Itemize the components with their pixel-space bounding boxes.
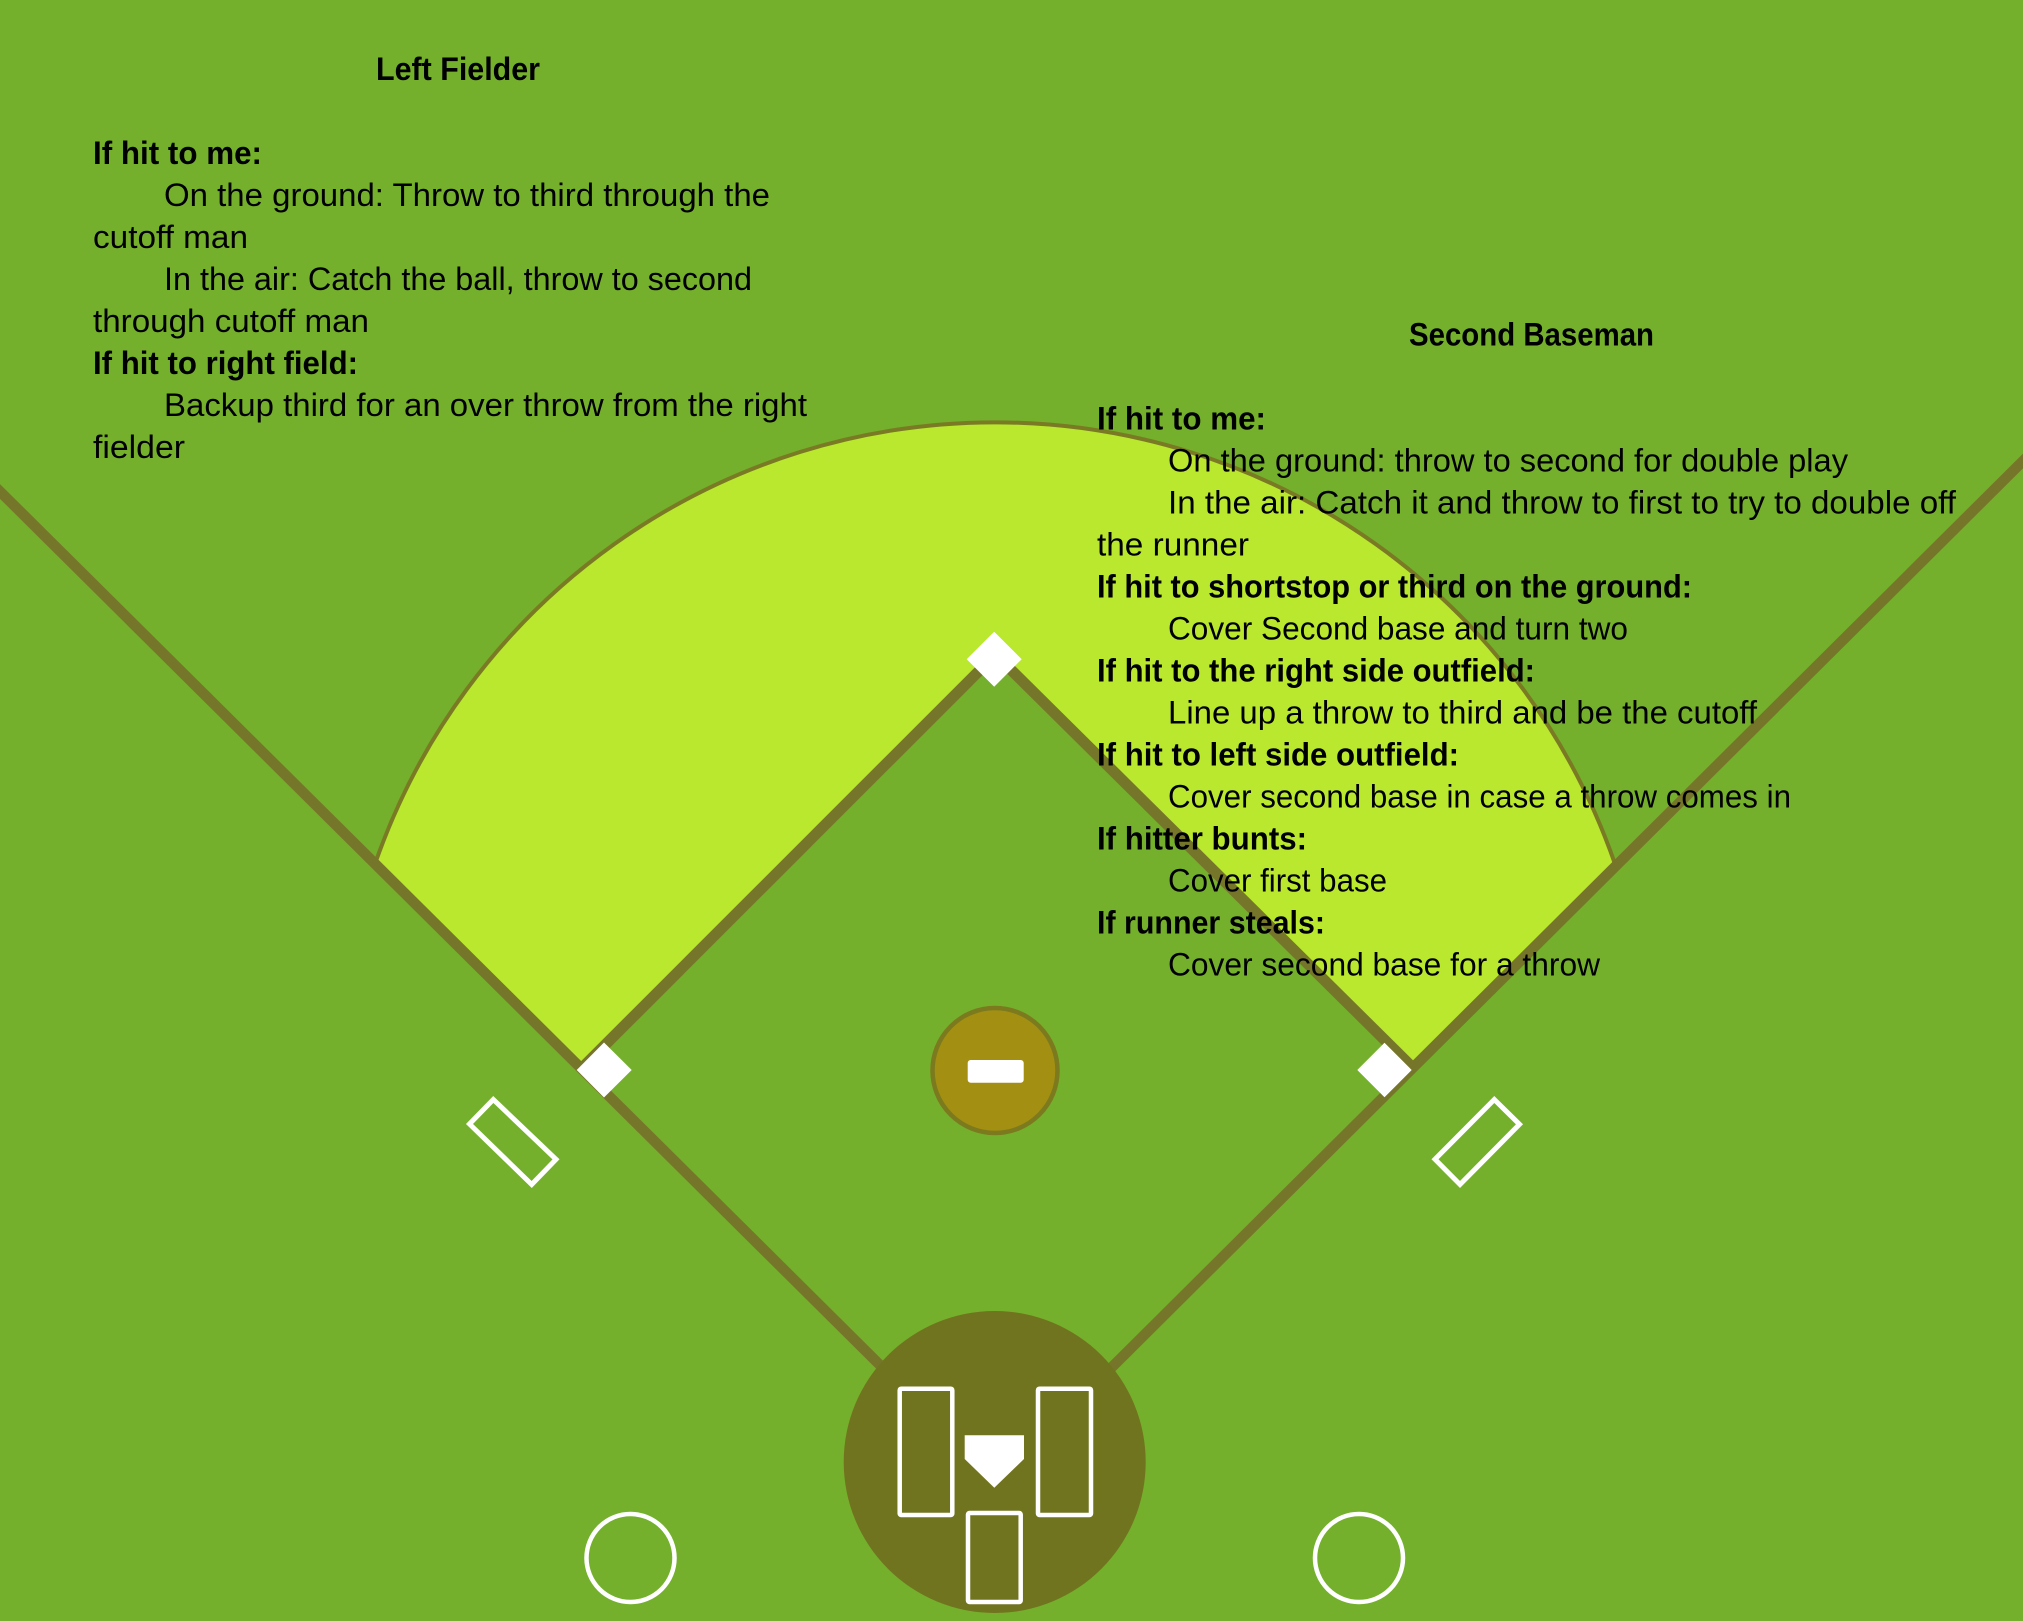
text block: second baseman: If hit to left side outfield:: [1097, 736, 1459, 772]
text block: second baseman: Cover second base for a throw: [1168, 946, 1601, 982]
outfield dirt arc: [375, 422, 1615, 1068]
pitcher's mound: [932, 1008, 1058, 1133]
third base: [577, 1042, 632, 1098]
text block: left fielder: fielder: [93, 429, 185, 465]
base path: first to second: [995, 654, 1410, 1065]
pitcher's rubber: [968, 1060, 1024, 1083]
base path: third to second: [582, 656, 994, 1068]
text block: left fielder: Backup third for an over throw from the right: [164, 387, 807, 423]
heading: second baseman: Second Baseman: [1409, 316, 1654, 352]
second base: [967, 632, 1022, 687]
text block: second baseman: If hit to me:: [1097, 400, 1266, 436]
text block: second baseman: Cover second base in case a throw comes in: [1168, 778, 1791, 814]
text block: second baseman: If hit to the right side outfield:: [1097, 652, 1535, 688]
text block: second baseman: Line up a throw to third and be the cutoff: [1168, 694, 1757, 730]
third base coach box: [470, 1100, 556, 1184]
text block: left fielder: through cutoff man: [93, 303, 369, 339]
text block: second baseman: the runner: [1097, 526, 1249, 562]
left foul line: [0, 486, 890, 1375]
first base: [1357, 1043, 1412, 1097]
right foul line: [1100, 456, 2023, 1379]
first base coach box: [1435, 1100, 1520, 1184]
home plate: [965, 1435, 1024, 1488]
left on-deck circle: [586, 1514, 674, 1602]
right batter's box: [1038, 1389, 1091, 1515]
text block: second baseman: On the ground: throw to second for double play: [1168, 442, 1848, 478]
text block: left fielder: On the ground: Throw to third through the: [164, 177, 770, 213]
text block: second baseman: In the air: Catch it and throw to first to try to double off: [1168, 484, 1956, 520]
outfield arc outline: [375, 422, 1615, 864]
text block: second baseman: If runner steals:: [1097, 904, 1325, 940]
home plate area: [844, 1311, 1146, 1613]
text block: second baseman: [1097, 316, 1956, 982]
text block: left fielder: In the air: Catch the ball, throw to second: [164, 261, 752, 297]
text block: left fielder: cutoff man: [93, 219, 248, 255]
catcher's box: [968, 1513, 1021, 1602]
left batter's box: [900, 1389, 952, 1515]
text block: left fielder: [93, 51, 807, 465]
text block: second baseman: Cover Second base and turn two: [1168, 610, 1628, 646]
text block: second baseman: If hitter bunts:: [1097, 820, 1307, 856]
right on-deck circle: [1315, 1514, 1403, 1602]
text block: left fielder: If hit to right field:: [93, 345, 358, 381]
text block: second baseman: If hit to shortstop or third on the ground:: [1097, 568, 1692, 604]
text block: left fielder: If hit to me:: [93, 135, 262, 171]
text block: second baseman: Cover first base: [1168, 862, 1387, 898]
heading: left fielder: Left Fielder: [376, 51, 540, 87]
